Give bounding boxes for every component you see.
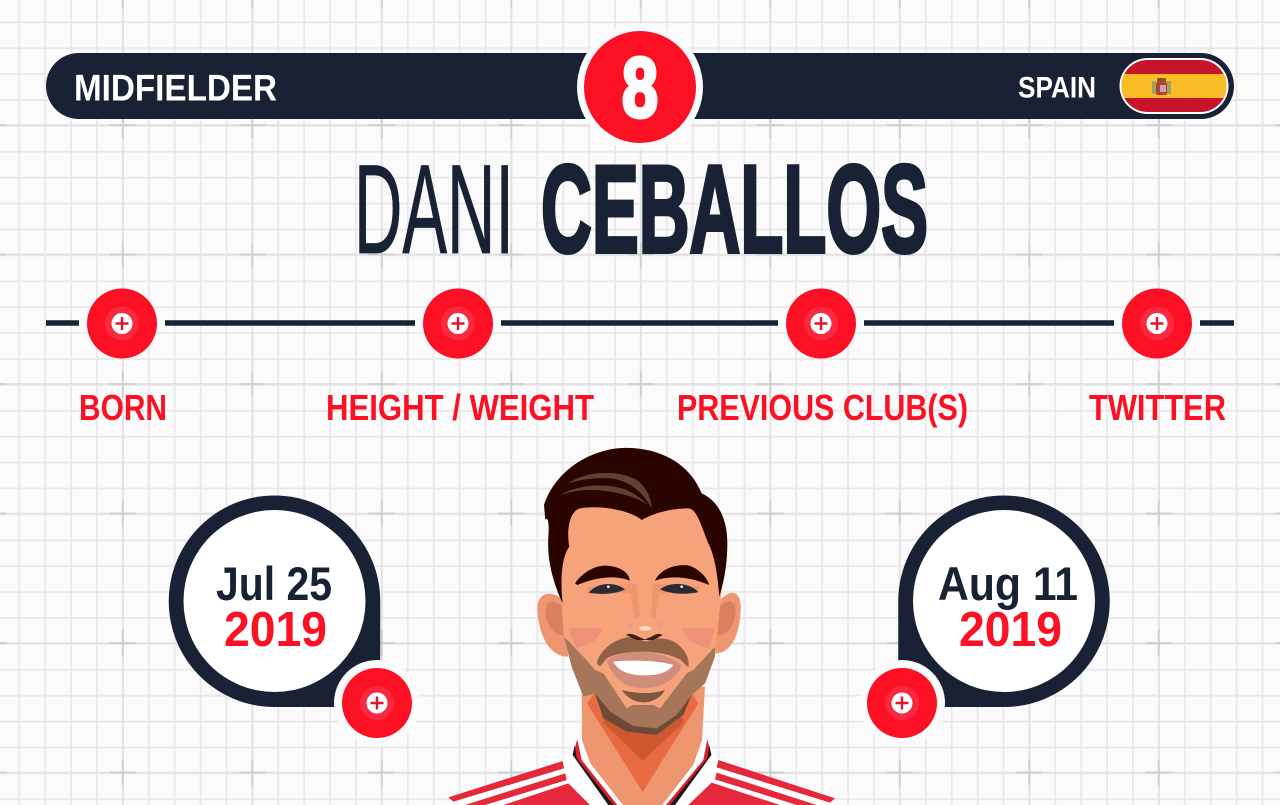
icon: plus badge bbox=[867, 668, 937, 738]
mouth bbox=[607, 652, 682, 688]
hair bbox=[544, 448, 727, 603]
collar stripes bbox=[573, 739, 711, 805]
eyebrows bbox=[575, 565, 709, 585]
title: player name bbox=[354, 138, 928, 280]
ears bbox=[537, 593, 741, 657]
icon: plus badge bbox=[342, 668, 412, 738]
icon: plus badge height weight bbox=[423, 288, 493, 358]
beard bbox=[564, 637, 715, 735]
cheek shading bbox=[568, 583, 715, 648]
icon: plus badge twitter bbox=[1122, 288, 1192, 358]
player portrait illustration bbox=[447, 448, 837, 805]
shirt bbox=[447, 738, 837, 805]
label: previous clubs: PREVIOUS CLUB(S) bbox=[677, 387, 968, 428]
year text: 2019 bbox=[224, 603, 327, 657]
icon: plus badge born bbox=[87, 288, 157, 358]
nose bbox=[626, 626, 663, 640]
date text: Aug 11 bbox=[938, 557, 1078, 610]
icon: plus badge previous clubs bbox=[786, 288, 856, 358]
face bbox=[561, 503, 722, 735]
neck bbox=[582, 687, 705, 805]
number badge: 8 bbox=[622, 40, 658, 134]
number badge bbox=[577, 24, 703, 150]
flag of Spain bbox=[1120, 58, 1228, 114]
title: player name: DANI bbox=[354, 138, 514, 280]
country label: SPAIN bbox=[1018, 72, 1096, 104]
year text: 2019 bbox=[959, 603, 1062, 657]
date callout: left bbox=[169, 496, 420, 746]
eyes bbox=[588, 584, 698, 594]
date text: Jul 25 bbox=[216, 557, 332, 610]
header bar bbox=[46, 24, 1234, 150]
label: height and weight: HEIGHT / WEIGHT bbox=[326, 387, 594, 428]
label: born: BORN bbox=[79, 387, 167, 428]
timeline bbox=[46, 288, 1234, 358]
label: twitter: TWITTER bbox=[1089, 387, 1226, 428]
title: player name: CEBALLOS bbox=[541, 141, 928, 279]
date callout: right bbox=[859, 496, 1110, 746]
position label: MIDFIELDER bbox=[74, 68, 277, 108]
